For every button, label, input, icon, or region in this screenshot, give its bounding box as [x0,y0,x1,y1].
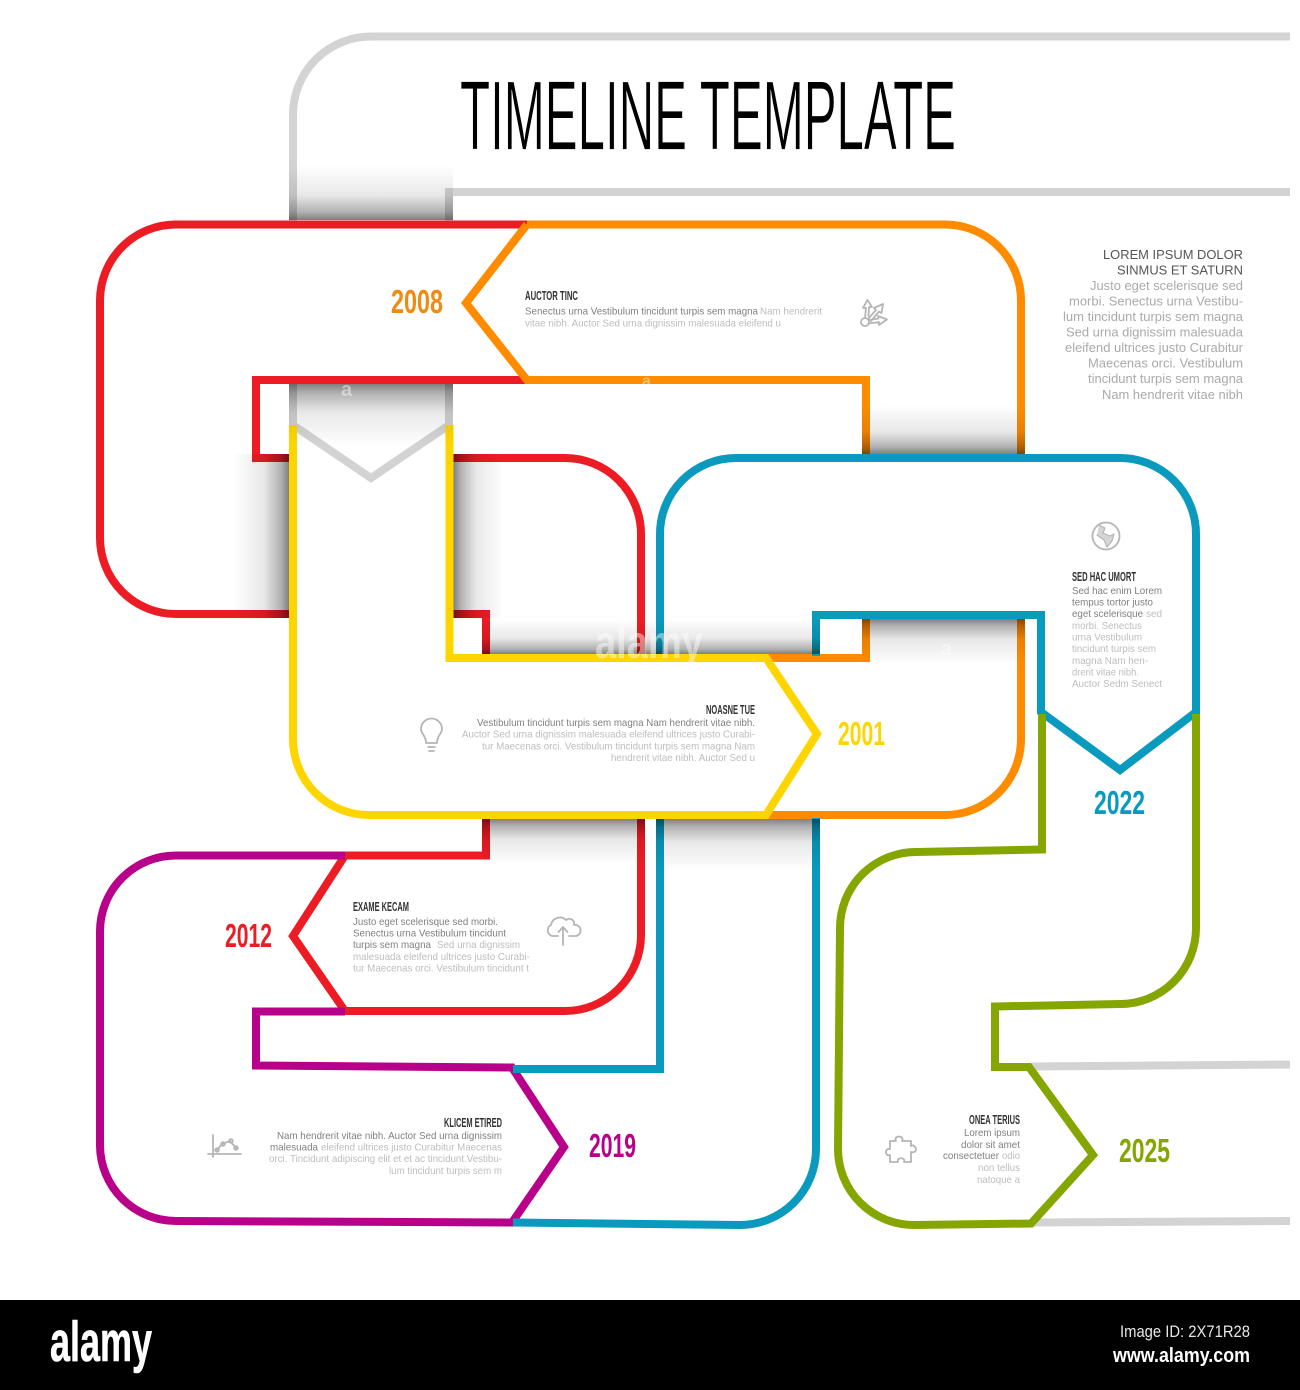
block: Klicem Etired: orci. Tincidunt adipiscing elit et et ac tincidunt.Vestibu- [269,1153,502,1165]
block: Sed Hac Umort: urna Vestibulum [1072,632,1142,644]
block: Onea Terius: odio [1002,1150,1020,1162]
red ribbon: 2008 to 2012 [100,224,641,1011]
block: Sed Hac Umort: morbi. Senectus [1072,620,1142,632]
block: Exame Kecam [353,900,530,974]
watermark [341,373,953,668]
intro text block: Sed urna dignissim malesuada [1066,324,1244,340]
intro text block: Nam hendrerit vitae nibh [1102,387,1243,402]
block: Sed Hac Umort: SED HAC UMORT [1072,570,1136,584]
block: Sed Hac Umort: tincidunt turpis sem [1072,643,1156,655]
green ribbon: 2022 to 2025 [838,714,1196,1225]
block: Onea Terius: natoque a [977,1174,1020,1186]
magenta ribbon: 2019 [100,856,564,1222]
block: Klicem Etired: lum tincidunt turpis sem m [389,1165,502,1177]
block: Sed Hac Umort: Auctor Sedm Senect [1072,678,1162,690]
icon: line chart [208,1135,241,1157]
block: Sed Hac Umort: eget scelerisque [1072,608,1143,620]
intro text block: eleifend ultrices justo Curabitur [1065,340,1244,355]
block: Exame Kecam: EXAME KECAM [353,900,409,914]
watermark: a [941,638,953,660]
year 2008: 2008 [391,283,443,320]
block: Auctor Tinc: vitae nibh. Auctor Sed urna dignissim malesuada eleifend u [525,318,781,330]
block: Onea Terius [943,1113,1020,1186]
intro text block [1063,247,1244,402]
intro text block: LOREM IPSUM DOLOR [1103,247,1243,262]
block: Klicem Etired: Nam hendrerit vitae nibh. Auctor Sed urna dignissim [277,1130,502,1142]
block: Sed Hac Umort: sed [1146,608,1162,620]
block: Onea Terius: ONEA TERIUS [969,1113,1020,1127]
block: Noasne Tue [462,703,755,764]
image id: Image ID: 2X71R28 [1120,1322,1250,1341]
intro text block: Justo eget scelerisque sed [1090,278,1243,293]
watermark: a [642,373,651,390]
intro text block: morbi. Senectus urna Vestibu- [1069,294,1243,308]
year 2012: 2012 [225,917,272,954]
logo: alamy: alamy [50,1310,152,1374]
intro text block: tincidunt turpis sem magna [1088,371,1244,386]
block: Sed Hac Umort: Sed hac enim Lorem [1072,585,1162,597]
block: Klicem Etired [269,1116,502,1177]
teal ribbon: 2019 to 2022 [513,458,1196,1225]
block: Exame Kecam: Senectus urna Vestibulum tincidunt [353,928,506,940]
year 2001: 2001 [838,715,885,752]
block: Auctor Tinc: Senectus urna Vestibulum tincidunt turpis sem magna [525,306,758,318]
block: Auctor Tinc [525,289,822,330]
block: Klicem Etired: eleifend ultrices justo Curabitur Maecenas [321,1142,502,1154]
block: Auctor Tinc: AUCTOR TINC [525,289,578,303]
block: Exame Kecam: Justo eget scelerisque sed morbi. [353,916,498,928]
watermark: alamy [595,616,703,668]
block: Onea Terius: Lorem ipsum [964,1127,1020,1139]
intro text block: lum tincidunt turpis sem magna [1063,309,1244,324]
year 2019: 2019 [589,1127,636,1164]
block: Noasne Tue: NOASNE TUE [706,703,755,717]
block: Sed Hac Umort: tempus tortor justo [1072,596,1153,608]
year 2025: 2025 [1119,1132,1170,1169]
icon: cloud upload [548,918,581,945]
block: Klicem Etired: malesuada [270,1142,318,1154]
block: Noasne Tue: hendrerit vitae nibh. Auctor Sed u [611,752,755,764]
block: Noasne Tue: Auctor Sed urna dignissim malesuada eleifend ultrices justo Curabi- [462,728,755,740]
footer bar [0,1300,1300,1390]
block: Sed Hac Umort: magna Nam hen- [1072,655,1148,667]
block: Noasne Tue: Vestibulum tincidunt turpis sem magna Nam hendrerit vitae nibh. [477,717,755,729]
block: Exame Kecam: tur Maecenas orci. Vestibulum tincidunt t [353,962,529,974]
block: Onea Terius: dolor sit amet [961,1139,1020,1151]
block: Klicem Etired: KLICEM ETIRED [444,1116,502,1130]
intro text block: SINMUS ET SATURN [1117,262,1243,278]
watermark: a [341,379,353,401]
website: www.alamy.com [1112,1345,1250,1367]
yellow ribbon: 2001 [293,425,817,815]
icon: light bulb [421,718,442,751]
fold shadows [233,165,1025,871]
block: Exame Kecam: malesuada eleifend ultrices justo Curabi- [353,951,530,963]
block: Onea Terius: non tellus [978,1162,1020,1174]
block: Exame Kecam: turpis sem magna [353,939,431,951]
icon: globe [1092,522,1120,550]
block: Onea Terius: consectetuer [943,1150,999,1162]
block: Exame Kecam: Sed urna dignissim [437,939,520,951]
orange ribbon: 2008 to 2001 [466,224,1021,815]
icon: puzzle piece [886,1136,916,1162]
block: Noasne Tue: tur Maecenas orci. Vestibulum tincidunt turpis sem magna Nam [482,740,755,752]
block: Auctor Tinc: Nam hendrerit [760,306,822,318]
block: Sed Hac Umort: drerit vitae nibh. [1072,666,1139,678]
year 2022: 2022 [1094,784,1145,821]
block: Sed Hac Umort [1072,570,1162,690]
gray ribbon: top header frame [293,36,1290,1222]
icon: diverging arrows [861,300,887,326]
intro text block: Maecenas orci. Vestibulum [1088,356,1243,370]
